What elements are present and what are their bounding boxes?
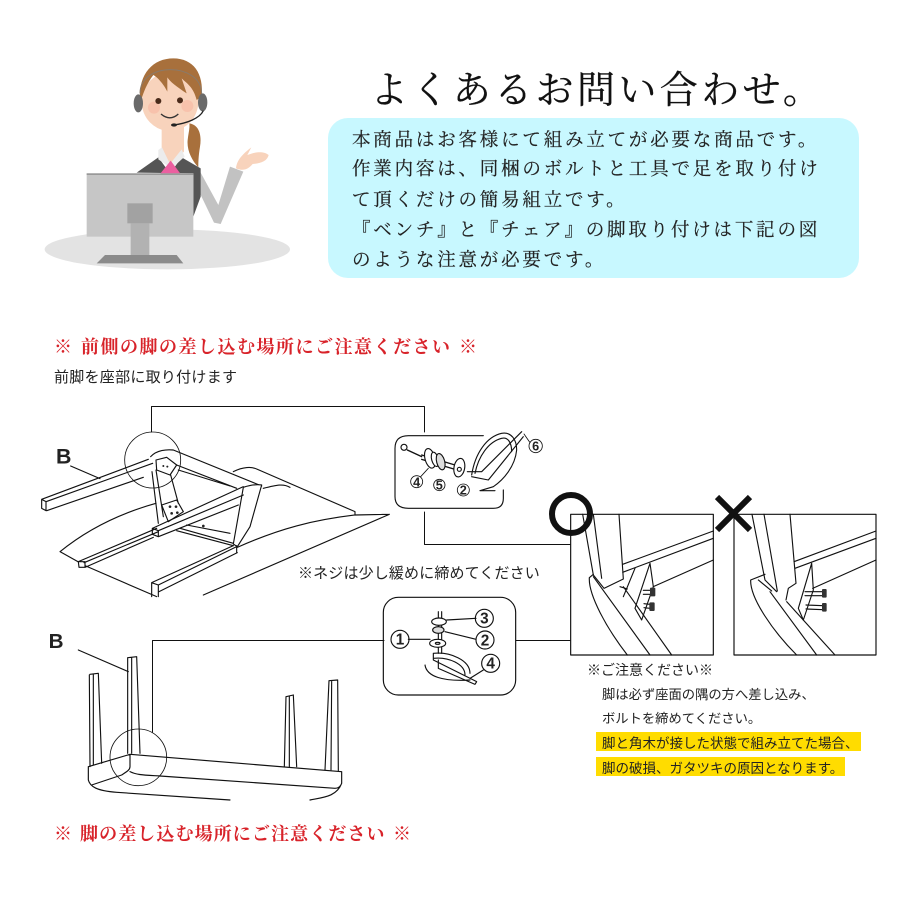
callout: chair hardware: 2 <box>460 484 467 498</box>
caution body: 脚は必ず座面の隅の方へ差し込み、 <box>602 686 815 702</box>
highlight line 1: 脚と角木が接した状態で組み立てた場合、 <box>602 735 858 751</box>
frame <box>734 514 876 655</box>
leg and rail <box>752 514 876 600</box>
hook part <box>425 653 477 684</box>
panel: correct assembly <box>571 514 713 655</box>
panel background <box>328 118 859 278</box>
ponytail <box>188 123 201 167</box>
neck <box>162 120 184 165</box>
zoom circle <box>110 729 167 786</box>
caution title: ※ご注意ください※ <box>587 662 713 678</box>
panel text: 『ベンチ』と『チェア』の脚取り付けは下記の図 <box>352 220 820 241</box>
zoom circle <box>125 432 181 488</box>
jacket <box>137 157 201 217</box>
plate and bolts <box>798 563 823 620</box>
heading: front legs caution: ※ <box>459 337 477 357</box>
heading: bench legs caution: ※ <box>54 824 72 844</box>
pink scarf <box>160 161 181 174</box>
panel: wrong assembly <box>734 514 876 655</box>
diagram: upturned bench <box>49 630 342 800</box>
frame rail <box>151 450 262 488</box>
heading: bench legs caution: 脚の差し込む場所にご注意ください <box>80 823 386 844</box>
cheeks <box>148 100 193 114</box>
panel text: のような注意が必要です。 <box>352 250 606 271</box>
illustration: operator woman at monitor <box>45 58 290 269</box>
middle leg <box>152 487 243 537</box>
monitor <box>87 173 193 263</box>
heading: bench legs caution: ※ <box>393 824 411 844</box>
number markers <box>391 609 500 678</box>
highlight line 2: 脚の破損、ガタツキの原因となります。 <box>602 760 843 776</box>
panel text <box>352 130 821 271</box>
bolt parts <box>401 444 466 478</box>
bolt parts <box>408 612 476 653</box>
back rest <box>233 485 262 547</box>
panel text: て頂くだけの簡易組立です。 <box>352 190 627 211</box>
seat edge <box>751 574 835 655</box>
sleeve <box>198 167 243 224</box>
hair <box>140 58 202 100</box>
circle mark: correct <box>552 495 590 533</box>
leg and rail <box>583 514 713 588</box>
eyes and smile <box>155 97 183 118</box>
callout: bench hardware: 2 <box>481 632 489 649</box>
front floor leg <box>152 546 237 597</box>
note: caution text: ボルトを締めてください。 <box>602 711 761 726</box>
hand <box>236 147 269 170</box>
note: loosely tighten screws: ※ネジは少し緩めに締めてください <box>298 565 540 582</box>
collar <box>158 147 185 168</box>
callout: chair hardware <box>395 432 542 508</box>
cross bar <box>177 525 233 546</box>
callout: chair hardware: 6 <box>532 440 539 454</box>
plate and bolts <box>620 563 653 620</box>
seat edge <box>589 574 672 655</box>
headset <box>134 70 207 127</box>
bracket <box>152 457 183 523</box>
callout: bench hardware: 4 <box>486 656 495 673</box>
hook part <box>467 432 523 491</box>
left floor leg <box>78 528 158 567</box>
cross mark: wrong <box>717 497 750 530</box>
rounded frame <box>395 436 503 508</box>
heading: front legs caution: 前側の脚の差し込む場所にご注意ください <box>81 336 452 357</box>
diagram: upturned chair <box>42 432 389 597</box>
callout: chair hardware: 4 <box>413 475 420 489</box>
seat <box>88 754 342 800</box>
panel text: 本商品はお客様にて組み立てが必要な商品です。 <box>352 130 819 151</box>
seat <box>60 467 389 597</box>
note: caution text <box>587 662 861 776</box>
callout: bench hardware: 3 <box>480 611 489 628</box>
legs <box>89 657 338 771</box>
title: よくあるお問い合わせ。 <box>370 70 824 112</box>
rear-left leg <box>42 459 153 511</box>
frame <box>571 514 713 655</box>
panel text: 作業内容は、同梱のボルトと工具で足を取り付け <box>352 159 821 180</box>
rounded frame <box>383 597 516 695</box>
face <box>142 72 198 131</box>
label B: B <box>56 444 71 468</box>
text: front leg instruction: 前脚を座部に取り付けます <box>54 369 237 386</box>
panel: intro text <box>328 118 859 278</box>
number markers <box>411 434 542 496</box>
connector lines <box>152 406 570 732</box>
callout: bench hardware <box>383 597 516 695</box>
heading: front legs caution: ※ <box>54 337 72 357</box>
callout: bench hardware: 1 <box>396 632 405 649</box>
floor shadow <box>45 229 290 269</box>
label B: B <box>49 630 64 653</box>
callout: chair hardware: 5 <box>436 479 443 493</box>
